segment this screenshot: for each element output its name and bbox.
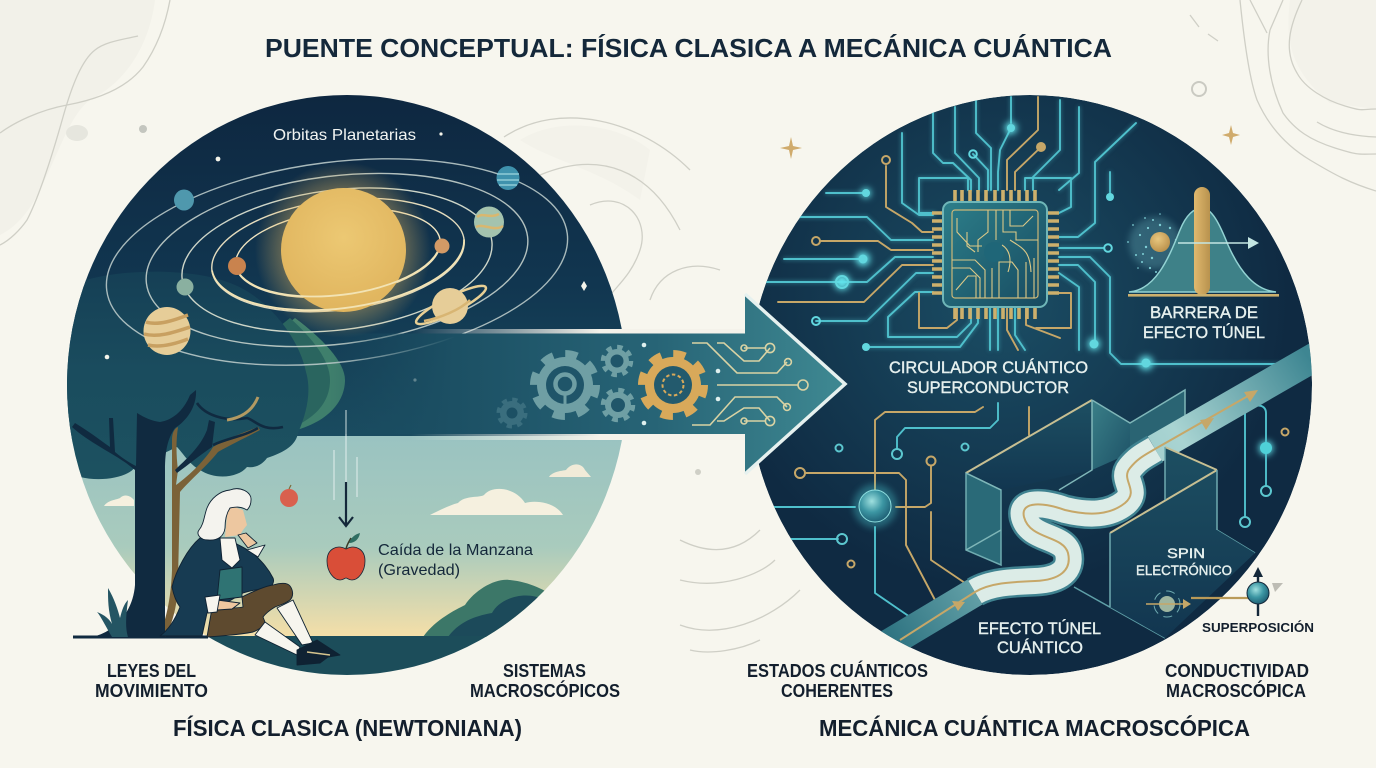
buckle [307,652,330,655]
spin electron small [1146,591,1191,617]
hand at chin [238,533,265,557]
face [225,505,247,537]
falling apple small [280,485,298,507]
panel: classical physics circle [60,90,640,681]
label: estados cuanticos coherentes: COHERENTES [781,681,893,701]
night sky [60,90,640,440]
right branches dark [175,420,215,473]
label: efecto tunel cuantico [978,619,1101,657]
canopy [60,272,308,479]
planet blue [174,190,194,210]
label: spin electronico: ELECTRÓNICO [1136,563,1232,578]
orbits back [95,134,579,390]
chip label [889,358,1088,397]
breeches [207,583,293,637]
planet green [474,206,504,238]
quantum orb [853,484,897,528]
tunnel walls [966,390,1255,638]
spin orb with arrow [1247,567,1283,616]
label: orbitas planetarias: Orbitas Planetarias [273,127,416,144]
chip micro traces [952,210,1038,298]
heading: mecanica cuantica: MECÁNICA CUÁNTICA MACROSCÓPICA [819,714,1250,741]
cloud left [104,496,134,506]
gray gear large [534,354,596,416]
back wall [1032,402,1092,454]
label: estados cuanticos coherentes: ESTADOS CUÁNTICOS [747,660,928,681]
heading: fisica clasica: FÍSICA CLASICA (NEWTONIANA) [173,714,522,741]
cloud right [430,489,563,515]
spin electron gold link [1191,597,1248,599]
wall edges [966,400,1092,473]
chip label: SUPERCONDUCTOR [907,379,1069,397]
hills [424,580,544,637]
label: conductividad macroscopica: CONDUCTIVIDAD [1165,661,1309,681]
tunnel barrier diagram [1127,187,1279,297]
chip pins [932,190,1059,319]
coat [160,538,274,636]
planet pale green [176,278,194,296]
tree [72,390,283,637]
circuit traces gold [778,97,1071,350]
label: caida de la manzana [378,542,533,579]
orbits front [212,240,464,310]
wig [198,489,251,540]
arrow circuit [692,343,808,426]
label: leyes del movimiento [95,661,208,701]
barrier label: BARRERA DE [1150,304,1258,322]
resting hand [205,595,240,613]
cloud small [549,464,591,477]
stockings [255,600,313,655]
newton figure [160,489,340,665]
trunk [72,390,196,637]
label: sistemas macroscopicos [470,661,620,701]
planet jupiter [144,307,190,355]
branch highlight [227,397,258,420]
gray gear top [603,347,631,375]
label: sistemas macroscopicos: SISTEMAS [503,661,586,681]
shoes [297,640,340,665]
faded gear [498,400,526,426]
bridge arrow [330,294,845,474]
arrow body [330,294,843,473]
label: caida de la manzana: Caída de la Manzana [378,542,533,559]
chip label: CIRCULADOR CUÁNTICO [889,358,1088,377]
label: efecto tunel cuantico: EFECTO TÚNEL [978,619,1101,638]
ground [208,636,488,675]
ground line [73,636,208,638]
circuit nodes [812,122,1273,455]
gravity arrow [334,410,357,526]
arrow head border [745,294,845,474]
label: estados cuanticos coherentes [747,660,928,701]
circuit traces cyan [764,97,1288,364]
arrow white stripes [330,329,745,440]
gold gear [642,354,704,416]
planet saturn [413,280,489,330]
gray gear bottom [603,390,633,420]
stars [105,132,587,394]
canopy back [282,318,345,429]
barrier label: EFECTO TÚNEL [1143,323,1265,342]
sun [255,162,431,338]
grass [97,588,128,637]
tunnel ribbon [878,354,1320,650]
label: spin electronico [1136,548,1232,576]
planets [144,166,520,355]
panel: quantum circle [748,95,1320,675]
label: sistemas macroscopicos: MACROSCÓPICOS [470,680,620,701]
branches brown [158,427,260,637]
label: spin electronico: SPIN [1167,546,1205,561]
chip [932,190,1059,319]
sparkles [780,125,1240,159]
cravat [220,538,240,568]
ribbon arrows [952,390,1258,611]
front wall [1110,447,1255,638]
label: superposicion: SUPERPOSICIÓN [1202,620,1314,635]
planet striped blue [496,166,520,190]
left wall [966,473,1001,565]
barrier label [1144,306,1265,338]
title: PUENTE CONCEPTUAL: FÍSICA CLASICA A MECÁNICA CUÁNTICA [265,33,1112,63]
label: caida de la manzana: (Gravedad) [378,562,460,579]
planet orange [228,257,246,275]
label: conductividad macroscopica [1165,661,1309,701]
label: leyes del movimiento: LEYES DEL [107,661,196,681]
lower circuit traces [772,403,1288,617]
arrow dots [642,343,720,425]
label: leyes del movimiento: MOVIMIENTO [95,681,208,701]
label: efecto tunel cuantico: CUÁNTICO [997,638,1083,657]
apple large [327,533,365,580]
particle cloud [1127,213,1181,273]
planet small orange [434,238,450,254]
vest [217,567,242,600]
label: conductividad macroscopica: MACROSCÓPICA [1166,680,1306,701]
daytime sky [60,436,640,637]
